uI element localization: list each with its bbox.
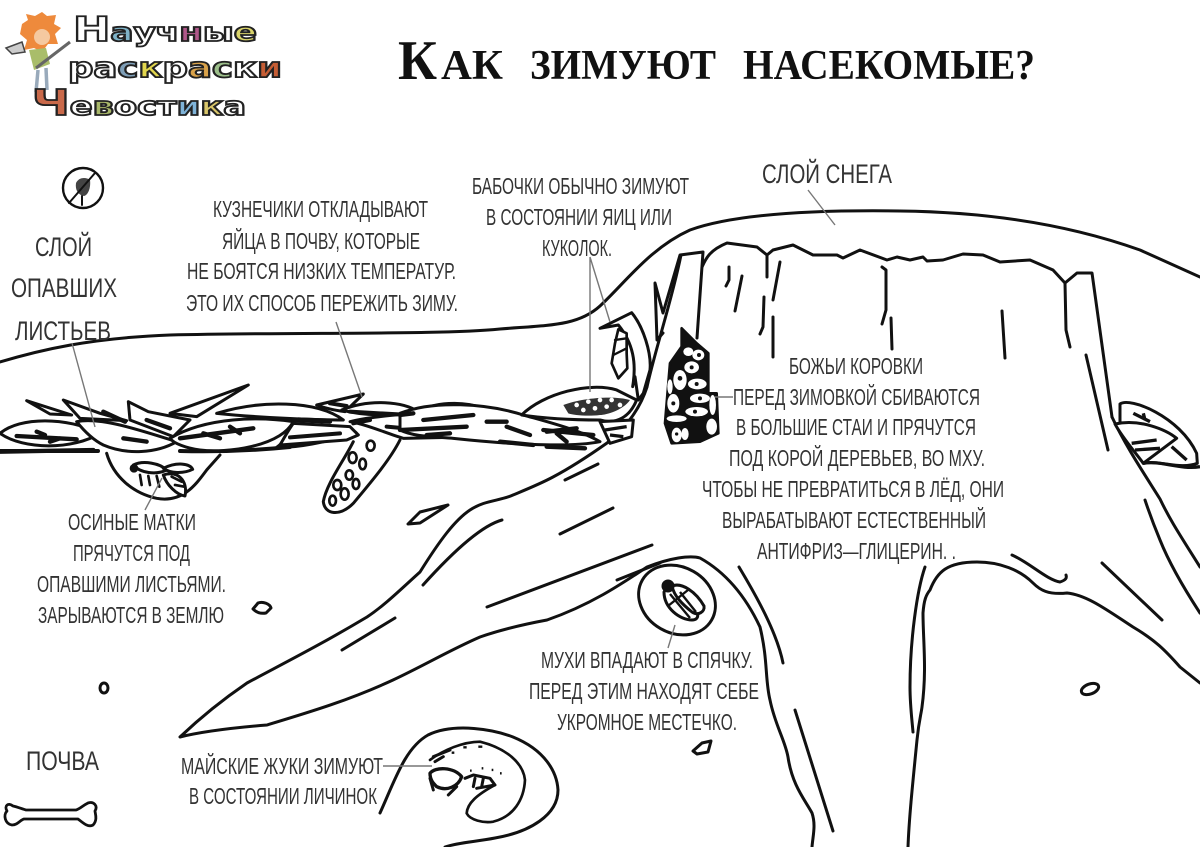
- leaf veins: [0, 412, 343, 452]
- ladybug cluster: [665, 328, 718, 443]
- logo line 2: ра скраски: [68, 51, 282, 84]
- label: слой опавших листьев: ЛИСТЬЕВ: [15, 316, 111, 346]
- logo: Научные раскраски Чевостика: [6, 10, 282, 124]
- text: божьи коровки: В БОЛЬШИЕ СТАИ И ПРЯЧУТСЯ: [736, 414, 976, 440]
- title: К: [398, 30, 437, 92]
- text: кузнечики: ЭТО ИХ СПОСОБ ПЕРЕЖИТЬ ЗИМУ.: [186, 290, 458, 316]
- larva chamber: [380, 728, 558, 847]
- right root: [1112, 417, 1200, 613]
- text: божьи коровки: БОЖЬИ КОРОВКИ: [789, 353, 923, 379]
- ground line: [0, 447, 290, 451]
- title: [398, 30, 1035, 92]
- central root: [910, 567, 925, 732]
- title: АК: [441, 43, 504, 89]
- fly: [662, 580, 704, 620]
- snow surface line: [0, 211, 1200, 362]
- stump top and bark: [702, 243, 1112, 417]
- text: майские жуки: [181, 752, 383, 809]
- chrysalis: [612, 329, 627, 378]
- text: кузнечики: КУЗНЕЧИКИ ОТКЛАДЫВАЮТ: [213, 196, 428, 222]
- text: кузнечики: ЯЙЦА В ПОЧВУ, КОТОРЫЕ: [222, 227, 420, 254]
- text: майские жуки: В СОСТОЯНИИ ЛИЧИНОК: [189, 783, 377, 809]
- logo line 1: Н ауч ны е: [73, 10, 257, 50]
- butterfly egg leaf: [522, 313, 650, 443]
- cocoon leaf: [600, 313, 650, 400]
- text: божьи коровки: ВЫРАБАТЫВАЮТ ЕСТЕСТВЕННЫЙ: [722, 506, 986, 533]
- leaves toward stump: [400, 405, 600, 448]
- text: осиные матки: ЗАРЫВАЮТСЯ В ЗЕМЛЮ: [38, 602, 224, 628]
- text: бабочки: КУКОЛОК.: [542, 235, 612, 261]
- text: божьи коровки: [702, 353, 1004, 564]
- wasp burrow: [107, 453, 220, 499]
- text: мухи: МУХИ ВПАДАЮТ В СПЯЧКУ.: [541, 647, 753, 673]
- text: бабочки: БАБОЧКИ ОБЫЧНО ЗИМУЮТ: [472, 173, 689, 199]
- text: майские жуки: МАЙСКИЕ ЖУКИ ЗИМУЮТ: [181, 752, 383, 779]
- left root: [180, 255, 814, 847]
- pebbles: [100, 505, 1100, 754]
- icon: bone: [5, 803, 96, 826]
- grasshopper egg pod: [323, 440, 400, 513]
- leaves at middle of band: [280, 394, 483, 445]
- right leaves: [1115, 402, 1200, 467]
- tree stump: [655, 243, 1112, 450]
- text: осиные матки: ПРЯЧУТСЯ ПОД: [73, 540, 190, 566]
- text: кузнечики: НЕ БОЯТСЯ НИЗКИХ ТЕМПЕРАТУР.: [187, 258, 456, 284]
- label: почва: ПОЧВА: [26, 746, 99, 776]
- text: бабочки: [472, 173, 689, 261]
- text: мухи: [529, 647, 759, 735]
- title: ЗИМУЮТ: [530, 43, 716, 89]
- text: осиные матки: [37, 509, 226, 628]
- text: осиные матки: ОСИНЫЕ МАТКИ: [68, 509, 196, 535]
- text: осиные матки: ОПАВШИМИ ЛИСТЬЯМИ.: [37, 571, 226, 597]
- May beetle larva: [430, 742, 525, 822]
- text: божьи коровки: ПОД КОРОЙ ДЕРЕВЬЕВ, ВО МХУ.: [729, 444, 985, 471]
- text: бабочки: В СОСТОЯНИИ ЯИЦ ИЛИ: [486, 204, 672, 230]
- wasp queen: [130, 463, 193, 496]
- logo line 3: Ч евост ика: [32, 83, 246, 124]
- fly chamber: [626, 551, 728, 649]
- leaf icon in circle: [63, 168, 103, 208]
- icon: Chevostik character: [6, 12, 70, 92]
- bark marks: [726, 262, 1005, 358]
- text: божьи коровки: АНТИФРИЗ—ГЛИЦЕРИН. .: [757, 538, 956, 564]
- leaf layer: [0, 313, 650, 513]
- label: СЛОЙ СНЕГА: СЛОЙ СНЕГА: [762, 158, 892, 189]
- text: божьи коровки: ПЕРЕД ЗИМОВКОЙ СБИВАЮТСЯ: [733, 383, 980, 410]
- label: слой опавших листьев: ОПАВШИХ: [11, 273, 117, 303]
- text: кузнечики: [186, 196, 458, 316]
- text: божьи коровки: ЧТОБЫ НЕ ПРЕВРАТИТЬСЯ В ЛЁД, ОНИ: [702, 476, 1004, 502]
- pointer lines: [72, 190, 835, 766]
- text: мухи: ПЕРЕД ЭТИМ НАХОДЯТ СЕБЕ: [529, 678, 759, 704]
- roots: [180, 255, 1200, 847]
- label: слой опавших листьев: [11, 231, 117, 346]
- label: слой опавших листьев: СЛОЙ: [35, 231, 92, 262]
- text: мухи: УКРОМНОЕ МЕСТЕЧКО.: [557, 709, 737, 735]
- title: НАСЕКОМЫЕ?: [743, 43, 1035, 89]
